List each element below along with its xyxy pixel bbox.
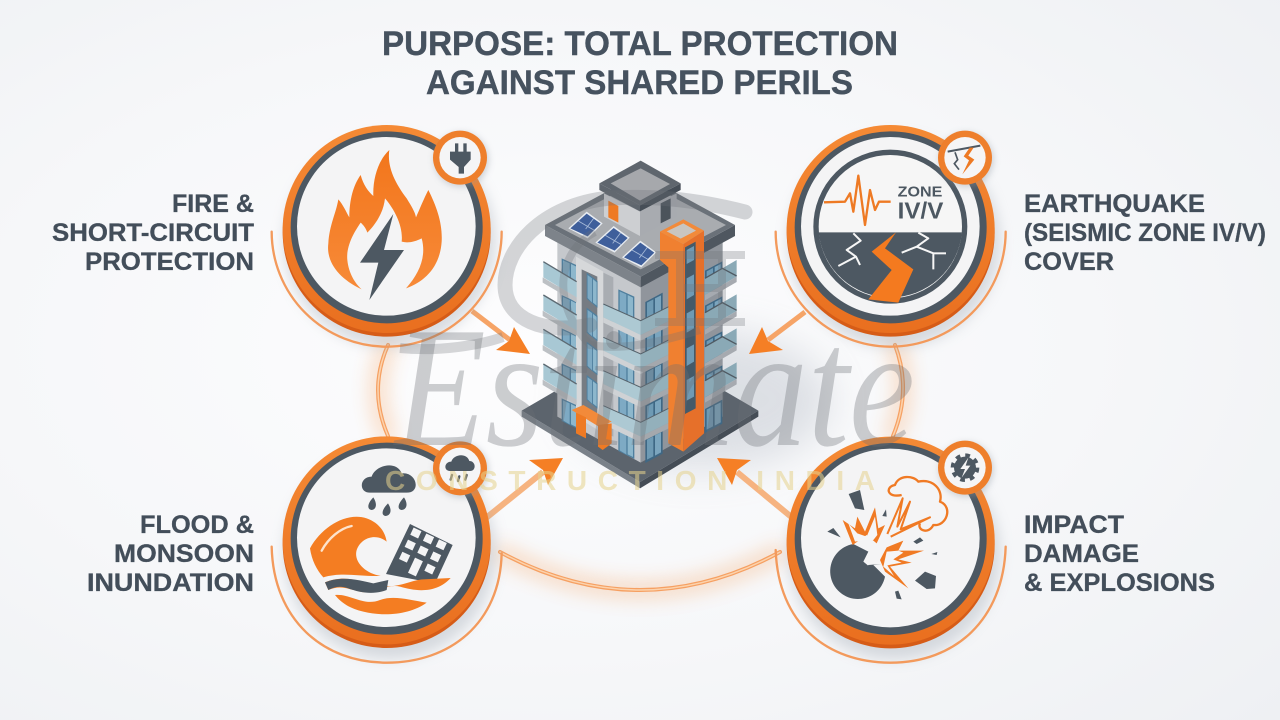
icon: seismic zone dial bbox=[816, 152, 965, 303]
fire medallion bbox=[272, 125, 502, 348]
arrow: flood to building bbox=[486, 458, 563, 518]
flood heading: FLOOD & bbox=[140, 511, 254, 539]
impact heading: IMPACT bbox=[1024, 511, 1124, 539]
glowing connection ring bbox=[378, 345, 903, 590]
roof slab bbox=[545, 173, 735, 287]
earthquake heading: (SEISMIC ZONE IV/V) bbox=[1024, 219, 1266, 247]
title: AGAINST SHARED PERILS bbox=[426, 64, 853, 102]
earthquake heading bbox=[1024, 190, 1266, 276]
icon: tilted building bbox=[386, 524, 453, 583]
title bbox=[382, 25, 898, 102]
title: PURPOSE: TOTAL PROTECTION bbox=[382, 25, 898, 63]
icon: plug badge bbox=[433, 131, 489, 187]
icon: rain badge bbox=[433, 441, 489, 498]
flood medallion bbox=[272, 436, 502, 663]
icon: gear bolt badge bbox=[938, 441, 994, 497]
panel: impact and explosions bbox=[776, 437, 1215, 663]
arrow: impact to building bbox=[717, 458, 795, 520]
earthquake heading: COVER bbox=[1024, 248, 1114, 276]
impact medallion bbox=[776, 437, 1006, 663]
flood heading bbox=[87, 511, 254, 597]
earthquake medallion bbox=[776, 125, 1006, 348]
fire heading: SHORT-CIRCUIT bbox=[52, 219, 254, 247]
earthquake heading: EARTHQUAKE bbox=[1024, 190, 1205, 218]
solar panels bbox=[568, 212, 656, 267]
arrow: fire to building bbox=[472, 311, 530, 354]
impact heading: DAMAGE bbox=[1024, 540, 1139, 568]
icon: explosion bbox=[827, 477, 947, 599]
watermark: Estimate script: Estimate bbox=[392, 293, 915, 483]
orange service shaft bbox=[660, 219, 704, 452]
penthouse bbox=[599, 161, 681, 236]
tower walls bbox=[557, 237, 723, 463]
building shadow bbox=[570, 330, 830, 470]
watermark: Construction India: CONSTRUCTION INDIA bbox=[385, 465, 875, 496]
flood heading: MONSOON bbox=[114, 540, 254, 568]
impact heading bbox=[1024, 511, 1215, 597]
arrows pointing at the building bbox=[472, 311, 805, 520]
watermark logo swoosh bbox=[400, 197, 745, 349]
icon: cracked ground badge bbox=[938, 131, 994, 187]
icon: rain cloud bbox=[362, 465, 416, 516]
fire heading: PROTECTION bbox=[85, 248, 254, 276]
icon: seismic zone dial: IV/V bbox=[898, 197, 943, 223]
panel: flood and monsoon bbox=[87, 436, 502, 663]
orange entrance canopy bbox=[572, 405, 612, 450]
base plate bbox=[522, 342, 758, 488]
icon: orange wave bbox=[310, 517, 451, 614]
impact heading: & EXPLOSIONS bbox=[1024, 569, 1215, 597]
illustration: isometric apartment building bbox=[522, 161, 758, 488]
flood heading: INUNDATION bbox=[87, 569, 254, 597]
central recess column bbox=[576, 257, 613, 437]
balconies bbox=[543, 260, 737, 442]
panel: fire and short-circuit bbox=[52, 125, 502, 348]
panel: earthquake bbox=[776, 125, 1266, 348]
fire heading: FIRE & bbox=[172, 190, 254, 218]
arrow: earthquake to building bbox=[749, 312, 805, 354]
left and right windows bbox=[562, 258, 722, 463]
fire heading bbox=[52, 190, 254, 276]
icon: flame with lightning bolt bbox=[328, 150, 442, 300]
icon: seismic zone dial: ZONE bbox=[898, 184, 943, 200]
